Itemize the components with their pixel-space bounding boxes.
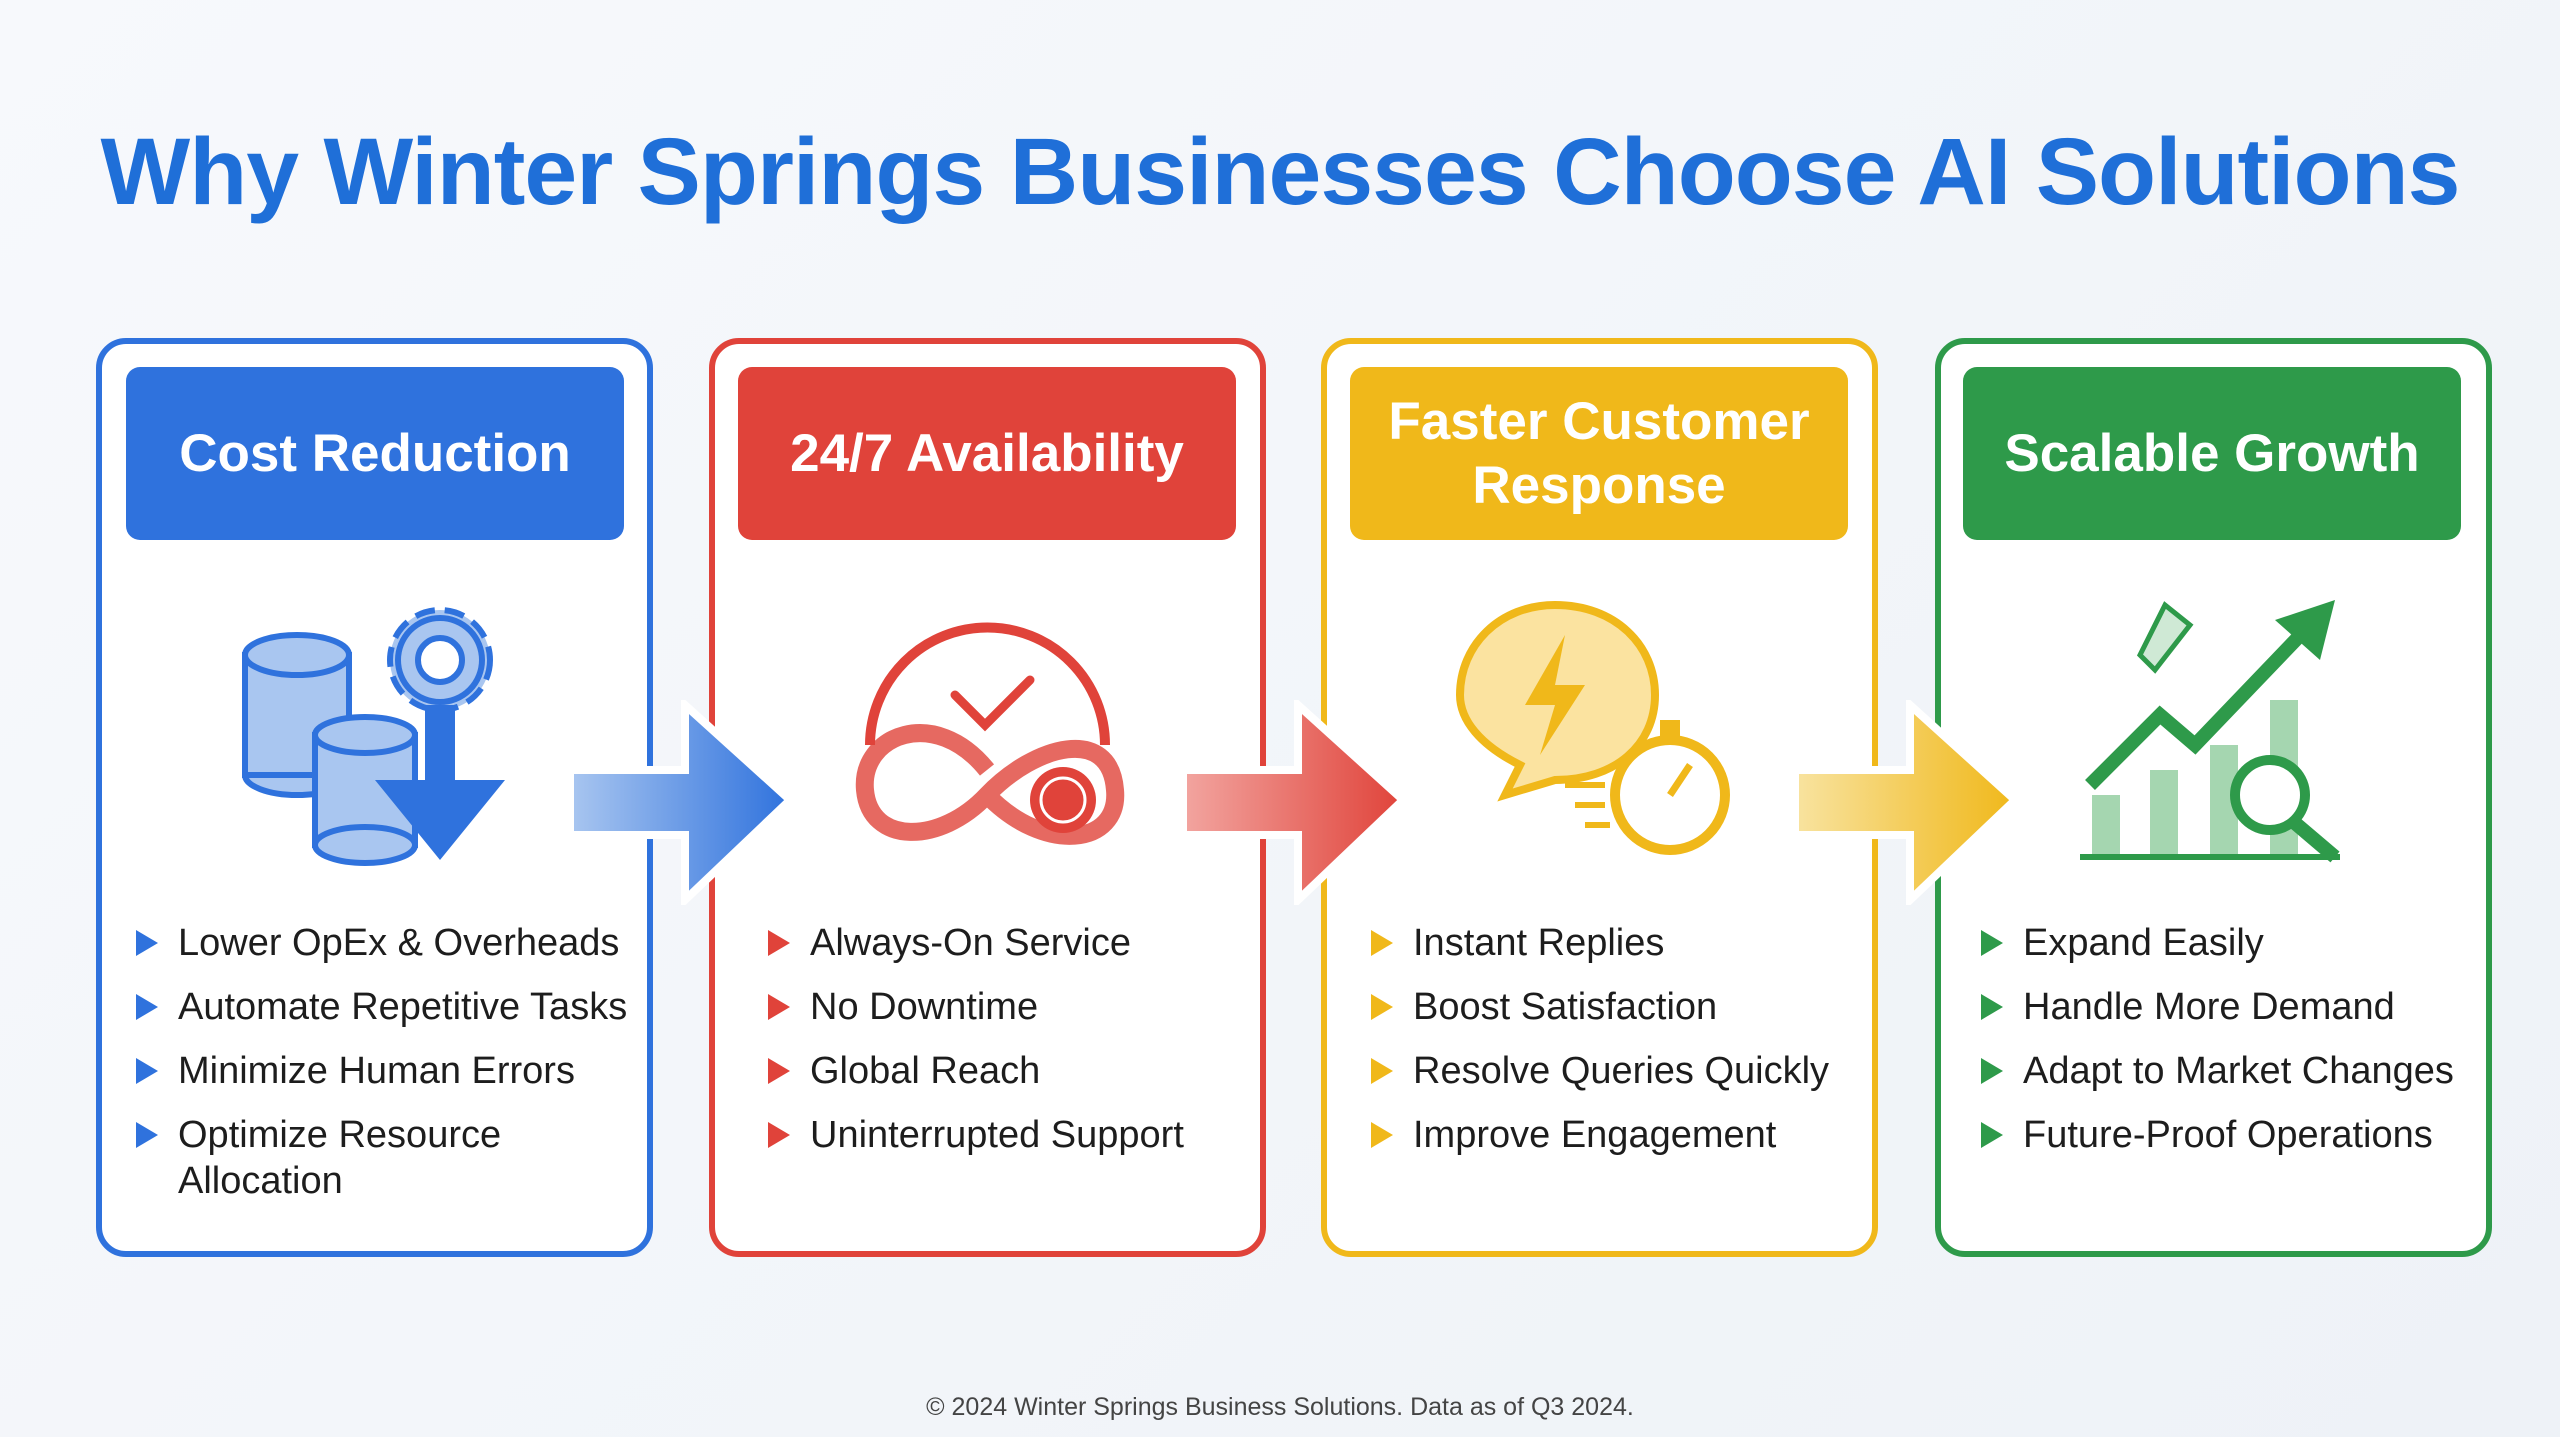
list: cost reduction: Minimize Human Errors xyxy=(178,1050,575,1092)
icon: coins and gear xyxy=(242,607,505,866)
list: availability: Always-On Service xyxy=(810,922,1131,964)
heading: faster response: Faster Customer xyxy=(1388,392,1810,450)
arrow: red xyxy=(1187,700,1398,905)
list: cost reduction: Lower OpEx & Overheads xyxy=(178,922,619,964)
icon: speech bubble and stopwatch xyxy=(1456,601,1730,855)
list: scalable growth: Adapt to Market Changes xyxy=(2023,1050,2454,1092)
list: availability: Uninterrupted Support xyxy=(810,1114,1184,1156)
heading: scalable growth xyxy=(1963,367,2461,540)
arrow: yellow xyxy=(1799,700,2009,905)
list: scalable growth: Future-Proof Operations xyxy=(2023,1114,2433,1156)
list: scalable growth xyxy=(1981,922,2454,1156)
heading: availability: 24/7 Availability xyxy=(790,424,1184,482)
heading: faster response: Response xyxy=(1472,456,1726,514)
list: faster response: Instant Replies xyxy=(1413,922,1664,964)
list: availability: Global Reach xyxy=(810,1050,1040,1092)
heading: faster response xyxy=(1350,367,1848,540)
list: cost reduction: Optimize Resource Allocation xyxy=(178,1114,501,1202)
list: cost reduction xyxy=(136,922,627,1202)
heading: availability xyxy=(738,367,1236,540)
panel: faster response xyxy=(1321,338,1878,1257)
list: cost reduction: Automate Repetitive Tasks xyxy=(178,986,627,1028)
heading: cost reduction xyxy=(126,367,624,540)
panel: scalable growth xyxy=(1935,338,2492,1257)
icon: clock infinity xyxy=(856,622,1124,845)
list: faster response: Improve Engagement xyxy=(1413,1114,1776,1156)
panel: cost reduction xyxy=(96,338,653,1257)
list: scalable growth: Expand Easily xyxy=(2023,922,2264,964)
list: scalable growth: Handle More Demand xyxy=(2023,986,2395,1028)
list: availability xyxy=(768,922,1184,1156)
title: Why Winter Springs Businesses Choose AI Solutions xyxy=(101,119,2459,225)
list: faster response: Resolve Queries Quickly xyxy=(1413,1050,1829,1092)
arrow: blue xyxy=(574,700,784,905)
list: faster response: Boost Satisfaction xyxy=(1413,986,1717,1028)
list: faster response xyxy=(1371,922,1829,1156)
footer: © 2024 Winter Springs Business Solutions. Data as of Q3 2024. xyxy=(926,1393,1634,1421)
list: availability: No Downtime xyxy=(810,986,1038,1028)
heading: scalable growth: Scalable Growth xyxy=(2004,424,2420,482)
panel: availability xyxy=(709,338,1266,1257)
icon: rocket and growth chart xyxy=(2080,600,2340,862)
heading: cost reduction: Cost Reduction xyxy=(179,424,571,482)
